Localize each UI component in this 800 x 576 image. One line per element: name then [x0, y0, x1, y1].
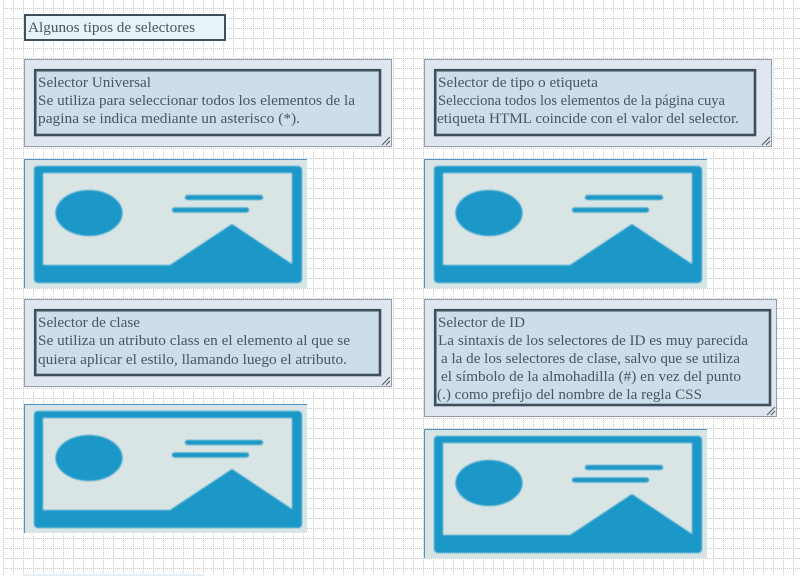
image placeholder 2 — [424, 159, 707, 288]
text: selector de ID: el símbolo de la almohadilla (#) en vez del punto — [441, 369, 741, 385]
title text: Algunos tipos de selectores — [28, 20, 195, 36]
text: selector universal: pagina se indica mediante un asterisco (*). — [38, 111, 300, 127]
image placeholder 3 — [24, 404, 307, 533]
text: selector de ID — [437, 315, 748, 403]
text: selector de clase: Se utiliza un atributo class en el elemento al que se — [38, 333, 350, 349]
text: selector de tipo — [437, 75, 739, 127]
panel: selector de tipo o etiqueta — [424, 60, 772, 146]
text: selector universal: Se utiliza para seleccionar todos los elementos de la — [38, 93, 355, 109]
panel: selector universal — [24, 60, 392, 146]
text: selector de ID: a la de los selectores de clase, salvo que se utiliza — [441, 351, 740, 367]
text: selector de ID: La sintaxis de los selectores de ID es muy parecida — [438, 333, 748, 349]
cropped element at bottom edge — [24, 574, 205, 576]
image placeholder 1 — [24, 159, 307, 288]
title box — [25, 15, 225, 40]
text: selector de tipo: Selector de tipo o etiqueta — [438, 75, 598, 91]
panel: selector de ID — [424, 300, 776, 416]
text: selector universal — [38, 75, 355, 127]
text: selector de clase: quiera aplicar el estilo, llamando luego el atributo. — [38, 352, 347, 368]
text: selector de ID: (.) como prefijo del nombre de la regla CSS — [437, 387, 702, 403]
text: selector de tipo: Selecciona todos los elementos de la página cuya — [438, 93, 725, 109]
panel: selector de clase — [24, 300, 392, 386]
text: selector de tipo: etiqueta HTML coincide con el valor del selector. — [437, 111, 739, 127]
text: selector universal: Selector Universal — [38, 75, 151, 91]
text: selector de clase — [38, 315, 350, 368]
text: selector de clase: Selector de clase — [38, 315, 140, 331]
text: selector de ID: Selector de ID — [438, 315, 525, 331]
image placeholder 4 — [424, 429, 707, 558]
